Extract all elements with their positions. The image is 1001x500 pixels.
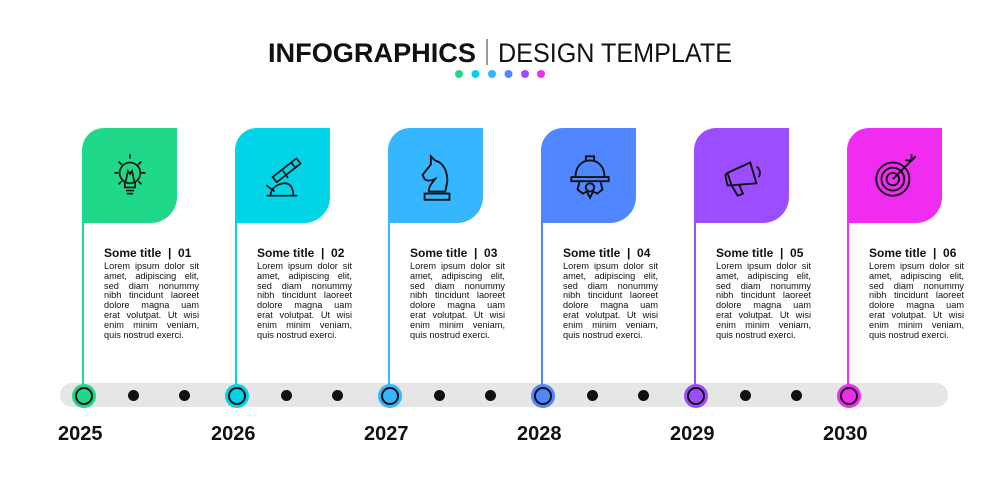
text: dolore magna uam — [869, 300, 964, 310]
panel: step 1 — [82, 128, 199, 384]
text: Some title | 05 — [716, 246, 803, 260]
text: nibh tincidunt laoreet — [563, 290, 658, 300]
text: sed diam nonummy — [869, 281, 964, 291]
panel: step 5 — [694, 128, 811, 384]
text: enim minim veniam, — [563, 320, 658, 330]
text: erat volutpat. Ut wisi — [869, 310, 964, 320]
panel: step 3 — [388, 128, 505, 384]
panel: step 2 — [235, 128, 352, 384]
text: Some title | 06 — [869, 246, 956, 260]
text: 2027 — [364, 423, 408, 445]
text: dolore magna uam — [104, 300, 199, 310]
text: enim minim veniam, — [410, 320, 505, 330]
text: amet, adipiscing elit, — [410, 271, 505, 281]
text: nibh tincidunt laoreet — [257, 290, 352, 300]
text: dolore magna uam — [716, 300, 811, 310]
panel: step 4 — [541, 128, 658, 384]
text: sed diam nonummy — [563, 281, 658, 291]
text: 2028 — [517, 423, 562, 445]
title: INFOGRAPHICS — [268, 38, 476, 68]
text: nibh tincidunt laoreet — [104, 290, 199, 300]
title — [268, 38, 732, 78]
text: dolore magna uam — [563, 300, 658, 310]
text: Some title | 01 — [104, 246, 191, 260]
title: DESIGN TEMPLATE — [498, 38, 732, 68]
text: dolore magna uam — [410, 300, 505, 310]
text: 2025 — [58, 423, 102, 445]
text: amet, adipiscing elit, — [563, 271, 658, 281]
text: erat volutpat. Ut wisi — [410, 310, 505, 320]
text: Some title | 03 — [410, 246, 497, 260]
text: erat volutpat. Ut wisi — [104, 310, 199, 320]
timeline track — [60, 383, 948, 407]
text: Lorem ipsum dolor sit — [410, 261, 505, 271]
text: Some title | 02 — [257, 246, 344, 260]
year labels — [58, 423, 868, 445]
text: quis nostrud exerci. — [104, 330, 184, 340]
panel: step 6 — [847, 128, 964, 384]
text: quis nostrud exerci. — [410, 330, 490, 340]
text: quis nostrud exerci. — [563, 330, 643, 340]
text: sed diam nonummy — [257, 281, 352, 291]
text: erat volutpat. Ut wisi — [257, 310, 352, 320]
text: enim minim veniam, — [104, 320, 199, 330]
text: sed diam nonummy — [104, 281, 199, 291]
text: Lorem ipsum dolor sit — [257, 261, 352, 271]
text: enim minim veniam, — [257, 320, 352, 330]
text: sed diam nonummy — [716, 281, 811, 291]
text: enim minim veniam, — [869, 320, 964, 330]
text: 2030 — [823, 423, 868, 445]
text: quis nostrud exerci. — [869, 330, 949, 340]
text: enim minim veniam, — [716, 320, 811, 330]
text: nibh tincidunt laoreet — [716, 290, 811, 300]
text: Lorem ipsum dolor sit — [563, 261, 658, 271]
text: Some title | 04 — [563, 246, 650, 260]
text: amet, adipiscing elit, — [716, 271, 811, 281]
text: dolore magna uam — [257, 300, 352, 310]
text: sed diam nonummy — [410, 281, 505, 291]
text: 2026 — [211, 423, 256, 445]
text: erat volutpat. Ut wisi — [716, 310, 811, 320]
text: quis nostrud exerci. — [257, 330, 337, 340]
text: nibh tincidunt laoreet — [410, 290, 505, 300]
text: quis nostrud exerci. — [716, 330, 796, 340]
text: Lorem ipsum dolor sit — [716, 261, 811, 271]
text: erat volutpat. Ut wisi — [563, 310, 658, 320]
text: amet, adipiscing elit, — [104, 271, 199, 281]
text: Lorem ipsum dolor sit — [869, 261, 964, 271]
text: Lorem ipsum dolor sit — [104, 261, 199, 271]
text: amet, adipiscing elit, — [869, 271, 964, 281]
text: nibh tincidunt laoreet — [869, 290, 964, 300]
text: 2029 — [670, 423, 714, 445]
text: amet, adipiscing elit, — [257, 271, 352, 281]
